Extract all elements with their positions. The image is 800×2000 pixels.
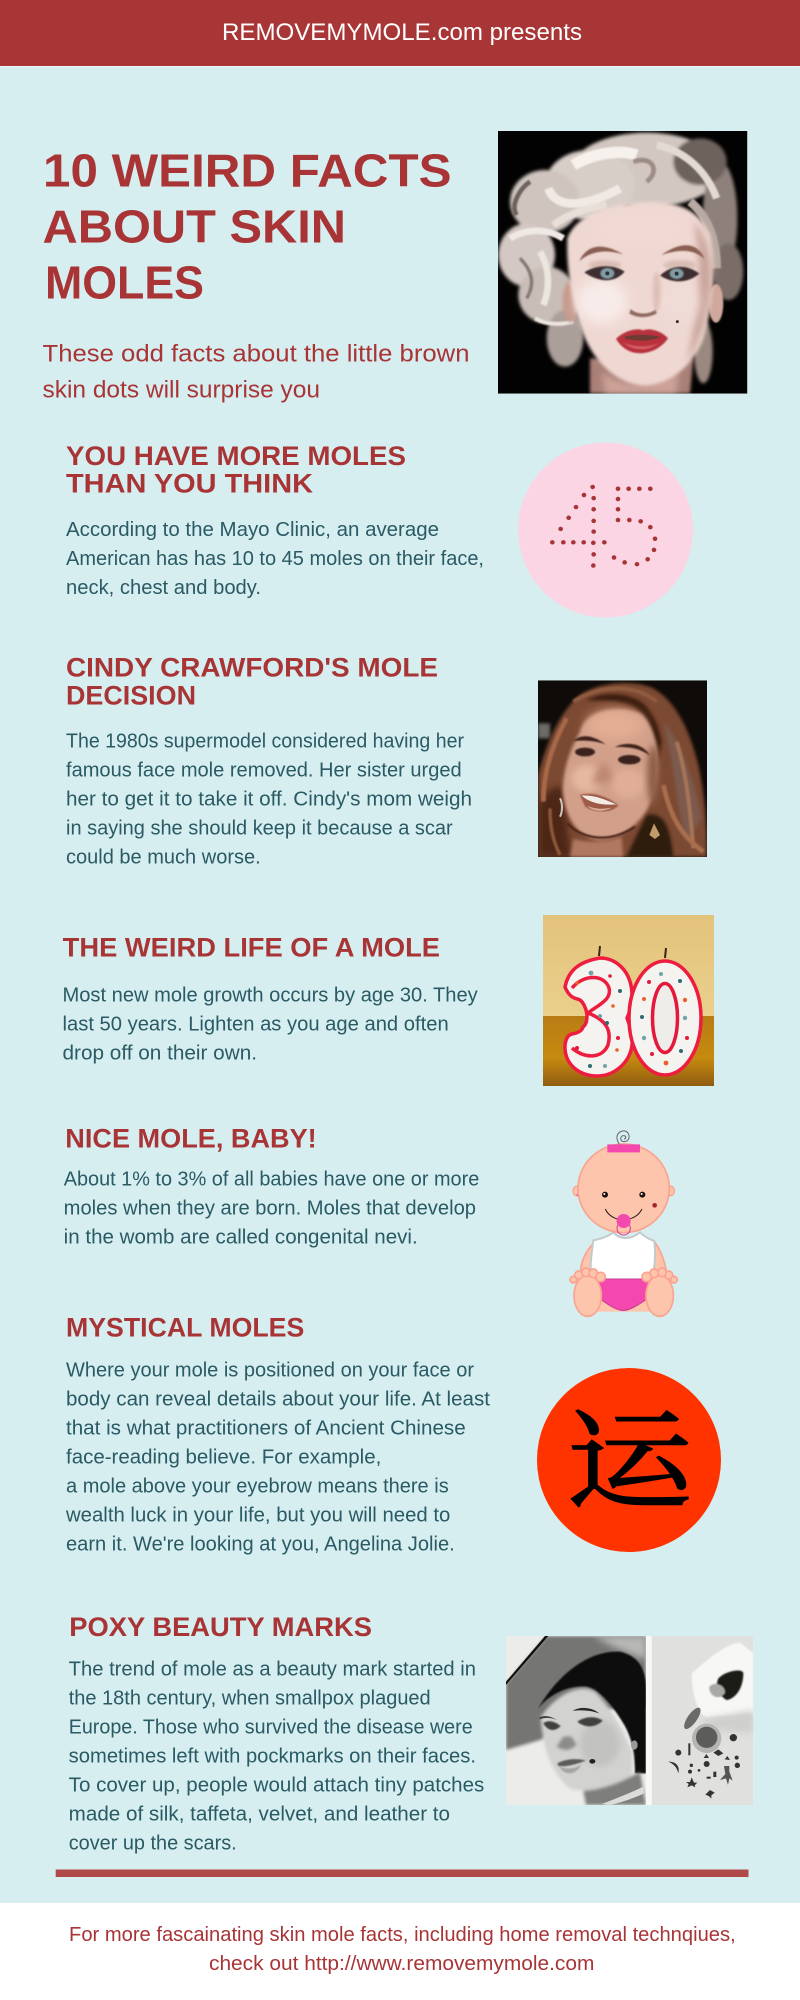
body text: fact 4: moles when they are born. Moles that develop	[64, 1198, 476, 1220]
body text: fact 5: wealth luck in your life, but you will need to	[65, 1505, 450, 1527]
footer	[0, 1903, 800, 2000]
body text: fact 2: could be much worse.	[66, 846, 261, 868]
body text: fact 3: Most new mole growth occurs by age 30. They	[62, 985, 478, 1007]
fact 2: Cindy Crawford	[66, 653, 707, 868]
body text: fact 5: that is what practitioners of Ancient Chinese	[66, 1418, 466, 1440]
body text: fact 1	[66, 519, 484, 599]
header banner: REMOVEMYMOLE.com presents	[222, 19, 582, 46]
heading: you have more moles than you think	[66, 441, 406, 499]
body text: fact 2: famous face mole removed. Her sister urged	[66, 760, 462, 782]
title: ABOUT SKIN	[42, 201, 346, 253]
left photo: woman in hat	[506, 1636, 646, 1805]
body text: fact 1: neck, chest and body.	[66, 577, 261, 599]
baby bow and curl	[607, 1131, 640, 1152]
body text: fact 5: earn it. We're looking at you, Angelina Jolie.	[66, 1534, 455, 1556]
fact 1: you have more moles	[66, 441, 693, 618]
body text: fact 4	[64, 1169, 479, 1249]
candle: 0	[629, 961, 701, 1075]
subtitle: These odd facts about the little brown	[42, 341, 470, 368]
icon: pink circle with dotted 45	[518, 442, 693, 618]
body text: fact 2: in saying she should keep it because a scar	[66, 818, 453, 840]
body text: fact 2: The 1980s supermodel considered having her	[66, 731, 464, 753]
subtitle	[42, 341, 470, 403]
body text: fact 1: According to the Mayo Clinic, an average	[66, 519, 439, 541]
footer: For more fascainating skin mole facts, including home removal technqiues,	[69, 1924, 736, 1946]
body text: fact 3: drop off on their own.	[62, 1043, 257, 1065]
body text: fact 6: sometimes left with pockmarks on their faces.	[69, 1746, 476, 1768]
body text: fact 4: About 1% to 3% of all babies have one or more	[64, 1169, 479, 1191]
candle: 3	[565, 958, 632, 1076]
heading: Cindy Crawford's mole decision	[66, 653, 438, 711]
header banner	[0, 0, 800, 67]
icon: red circle with Chinese character: 运	[566, 1375, 694, 1530]
icon: cartoon baby with mole	[570, 1131, 677, 1316]
body text: fact 5: a mole above your eyebrow means there is	[66, 1476, 449, 1498]
photo: Marilyn Monroe portrait with mole	[498, 131, 747, 394]
body text: fact 2	[66, 731, 472, 868]
heading: you have more moles than you think: THAN YOU THINK	[66, 469, 313, 499]
heading: nice mole, baby: NICE MOLE, BABY!	[65, 1124, 317, 1154]
subtitle: skin dots will surprise you	[42, 376, 320, 403]
body text: fact 3: last 50 years. Lighten as you age and often	[62, 1014, 449, 1036]
body text: fact 6: the 18th century, when smallpox plagued	[69, 1688, 431, 1710]
heading: Cindy Crawford's mole decision: CINDY CRAWFORD'S MOLE	[66, 653, 438, 683]
fact 4: nice mole, baby	[64, 1124, 677, 1316]
heading: the weird life of a mole: THE WEIRD LIFE OF A MOLE	[63, 933, 440, 963]
right photo: hand with patch box	[652, 1636, 753, 1805]
body text: fact 6: Europe. Those who survived the disease were	[69, 1717, 473, 1739]
body text: fact 3	[62, 985, 478, 1065]
fact 6: poxy beauty marks	[69, 1612, 753, 1855]
fact 5: mystical moles	[65, 1313, 721, 1556]
body text: fact 5: face-reading believe. For example,	[66, 1447, 381, 1469]
title: 10 WEIRD FACTS	[43, 145, 452, 197]
body text: fact 2: her to get it to take it off. Cindy's mom weigh	[66, 789, 472, 811]
title	[42, 145, 452, 309]
baby diaper	[595, 1279, 653, 1311]
baby legs	[570, 1268, 677, 1316]
body text: fact 6: made of silk, taffeta, velvet, and leather to	[69, 1804, 450, 1826]
body text: fact 5: Where your mole is positioned on your face or	[66, 1360, 474, 1382]
body text: fact 4: in the womb are called congenital nevi.	[64, 1227, 418, 1249]
fact 3: the weird life of a mole	[62, 915, 714, 1086]
body text: fact 5	[65, 1360, 490, 1556]
icon: red circle with Chinese character	[537, 1368, 721, 1552]
body text: fact 6: The trend of mole as a beauty mark started in	[69, 1659, 476, 1681]
footer: check out http://www.removemymole.com	[209, 1953, 594, 1975]
photo: birthday candles shaped as 30	[543, 915, 714, 1086]
baby body	[591, 1232, 655, 1280]
photo: Cindy Crawford portrait	[538, 680, 707, 857]
heading: poxy beauty marks: POXY BEAUTY MARKS	[69, 1612, 372, 1642]
heading: mystical moles: MYSTICAL MOLES	[66, 1313, 304, 1343]
heading: Cindy Crawford's mole decision: DECISION	[66, 681, 196, 711]
divider bar	[56, 1870, 748, 1877]
baby thighs	[580, 1282, 667, 1312]
title: MOLES	[45, 257, 204, 309]
body text: fact 5: body can reveal details about your life. At least	[66, 1389, 490, 1411]
baby head	[573, 1144, 674, 1235]
body text: fact 1: American has has 10 to 45 moles on their face,	[66, 548, 484, 570]
body text: fact 6	[69, 1659, 484, 1855]
photo: black and white beauty mark woman and patches	[506, 1636, 753, 1805]
body text: fact 6: cover up the scars.	[69, 1833, 237, 1855]
body text: fact 6: To cover up, people would attach tiny patches	[69, 1775, 484, 1797]
heading: you have more moles than you think: YOU HAVE MORE MOLES	[66, 441, 406, 471]
